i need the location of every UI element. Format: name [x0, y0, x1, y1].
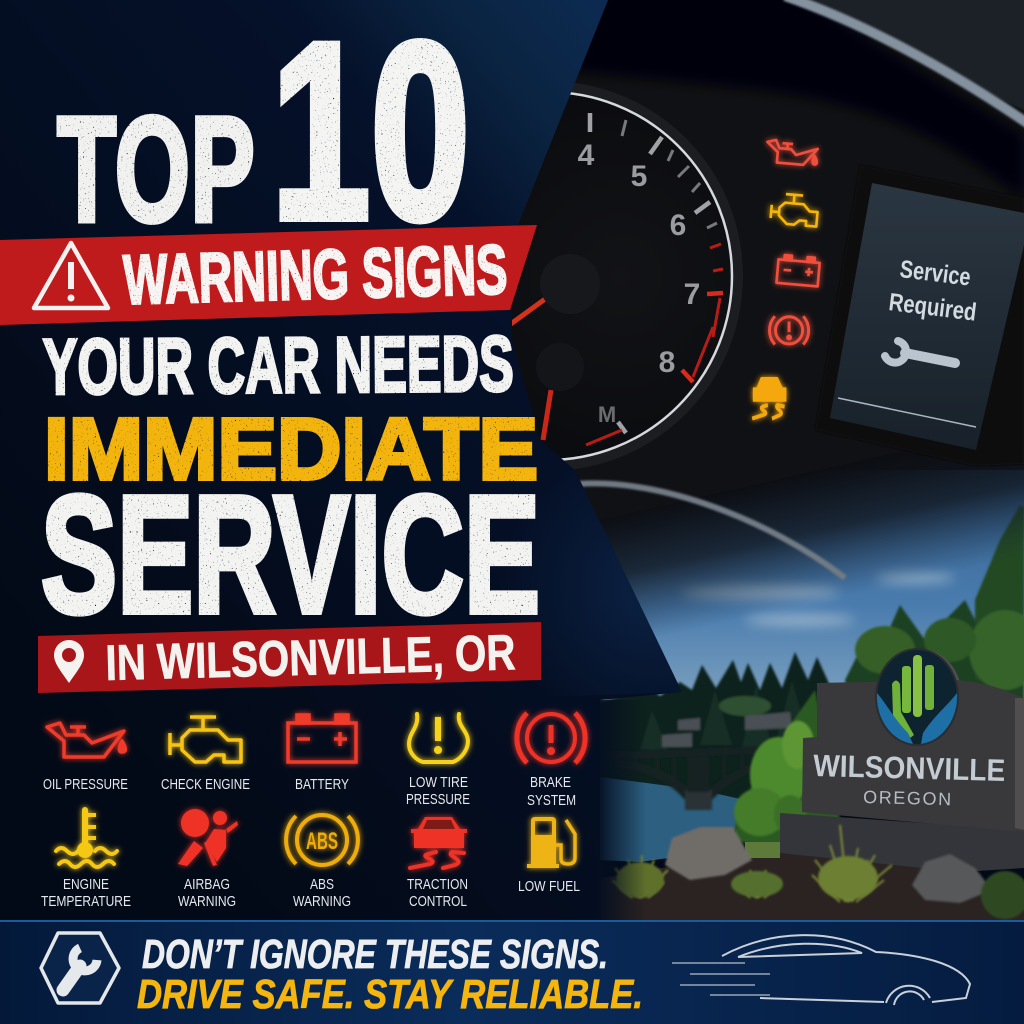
label: traction control: [407, 876, 468, 910]
label: airbag warning: WARNING: [178, 893, 236, 910]
navy left panel: [0, 0, 682, 921]
stone side: [1015, 698, 1024, 830]
icon: hex wrench: [41, 933, 119, 1003]
service: SERVICE: [41, 462, 540, 648]
grass tufts: [612, 825, 892, 902]
side fade into landscape: [596, 700, 646, 921]
knob 1: [540, 254, 600, 314]
footer line two: DRIVE SAFE. STAY RELIABLE.: [137, 971, 643, 1017]
label: low tire pressure: [406, 774, 470, 808]
footer band: [0, 920, 1024, 1024]
dashboard dark upper shade: [560, 0, 1024, 200]
icon: engine temperature: [56, 810, 117, 867]
your car needs: YOUR CAR NEEDS: [42, 319, 514, 411]
warning triangle icon: [34, 243, 108, 308]
village houses: [662, 712, 792, 747]
dashboard corner above arc: [795, 0, 1024, 110]
title: top: TOP: [57, 85, 255, 253]
label: check engine: CHECK ENGINE: [161, 776, 250, 793]
numerals: 6: [670, 209, 686, 242]
numerals: 8: [659, 346, 675, 379]
dash icon: traction: [752, 378, 786, 419]
river: [600, 777, 745, 862]
green bars: [892, 655, 934, 738]
white ticks: [622, 120, 717, 228]
label: engine temperature: ENGINE: [63, 876, 109, 893]
dashboard hood arc top right: [785, 0, 1024, 125]
dash icon: engine: [770, 193, 819, 227]
wrench: [63, 948, 97, 990]
logo oval: [876, 649, 958, 745]
icon: airbag warning: [178, 809, 238, 866]
icon: check engine: [170, 717, 241, 762]
screen wrench: [885, 341, 955, 363]
tachometer gauge: [353, 81, 743, 471]
dash icon: battery: [776, 255, 820, 286]
label: brake system: [527, 774, 576, 809]
label: traction control: CONTROL: [409, 893, 467, 910]
icon: battery: [288, 715, 356, 762]
monument sign: [780, 649, 1024, 872]
warning icon grid: [41, 713, 585, 910]
sky: [570, 470, 1024, 720]
bright foliage: [734, 505, 1024, 850]
title: [0, 0, 541, 693]
sign state: OREGON: [863, 787, 951, 809]
redline: [586, 244, 723, 445]
numerals: [578, 139, 700, 427]
grass verge: [745, 842, 780, 858]
navy diagonal highlight: [470, 470, 682, 700]
stone face: [802, 680, 1024, 832]
icon: speeding car: [672, 935, 970, 1005]
label: abs warning: ABS: [310, 876, 334, 893]
outer bezel: [353, 81, 743, 471]
icon: abs warning: [286, 815, 358, 865]
label: low tire pressure: LOW TIRE: [409, 774, 468, 791]
immediate: IMMEDIATE: [44, 401, 538, 498]
icon: brake system: [517, 713, 585, 763]
footer line one: DON’T IGNORE THESE SIGNS.: [142, 931, 608, 977]
dashboard photo background: [480, 0, 1024, 620]
major ticks: [590, 113, 710, 433]
icon: traction control: [410, 817, 467, 868]
label: airbag warning: [178, 876, 236, 910]
footer top line: [0, 920, 1024, 922]
screen bezel: [815, 165, 1024, 466]
numerals: M: [598, 402, 616, 427]
bridge: [600, 746, 782, 810]
numerals: 7: [684, 278, 700, 311]
location bar: [38, 622, 541, 693]
label: low fuel: LOW FUEL: [518, 878, 580, 895]
dial face: [365, 93, 731, 459]
stone arch: [880, 649, 962, 745]
icon: abs warning: ABS: [306, 828, 338, 855]
knob 2: [536, 343, 584, 391]
label: abs warning: WARNING: [293, 893, 351, 910]
label: low tire pressure: PRESSURE: [406, 791, 470, 808]
dash icon: oil: [766, 139, 818, 166]
rocks: [665, 827, 992, 903]
required text: Required: [887, 288, 978, 327]
hexagon: [41, 933, 119, 1003]
label: engine temperature: TEMPERATURE: [41, 893, 131, 910]
label: brake system: SYSTEM: [527, 792, 576, 809]
label: brake system: BRAKE: [530, 774, 571, 791]
display screen: [815, 165, 1024, 466]
icon: location pin: [54, 640, 84, 683]
icon: oil pressure: [47, 723, 125, 757]
needle 2: [543, 390, 551, 440]
ground mulch: [590, 850, 1024, 922]
lower dash arc: [578, 483, 845, 578]
icon: low fuel: [527, 817, 575, 868]
dash icon: brake: [769, 316, 809, 344]
blue leaves: [877, 693, 957, 744]
screen panel: [830, 183, 1024, 450]
clouds: [680, 573, 955, 626]
footer background: [0, 921, 1024, 1024]
location text: IN WILSONVILLE, OR: [105, 624, 516, 691]
dash warning lights: [752, 139, 820, 419]
numerals: 5: [631, 160, 647, 193]
service text: Service: [898, 255, 972, 292]
label: abs warning: [293, 876, 351, 910]
red banner: [0, 225, 537, 325]
numerals: 4: [578, 139, 595, 172]
logo: [876, 649, 958, 745]
dashboard fade over sky: [480, 0, 1024, 640]
label: battery: BATTERY: [295, 776, 349, 793]
label: airbag warning: AIRBAG: [184, 876, 230, 893]
screen rule: [838, 398, 976, 427]
warning signs: WARNING SIGNS: [122, 230, 508, 319]
label: engine temperature: [41, 876, 131, 910]
chrome ring: [364, 92, 732, 460]
distant forest: [590, 652, 840, 800]
plinth: [780, 813, 1024, 872]
sign name: WILSONVILLE: [813, 748, 1006, 788]
needle 1: [508, 294, 552, 326]
icon: low tire pressure: [409, 714, 468, 762]
label: traction control: TRACTION: [407, 876, 468, 893]
redline major: [682, 293, 723, 382]
label: oil pressure: OIL PRESSURE: [43, 776, 128, 793]
dashboard upper block: [480, 0, 1024, 548]
landscape photo: [570, 470, 1024, 922]
